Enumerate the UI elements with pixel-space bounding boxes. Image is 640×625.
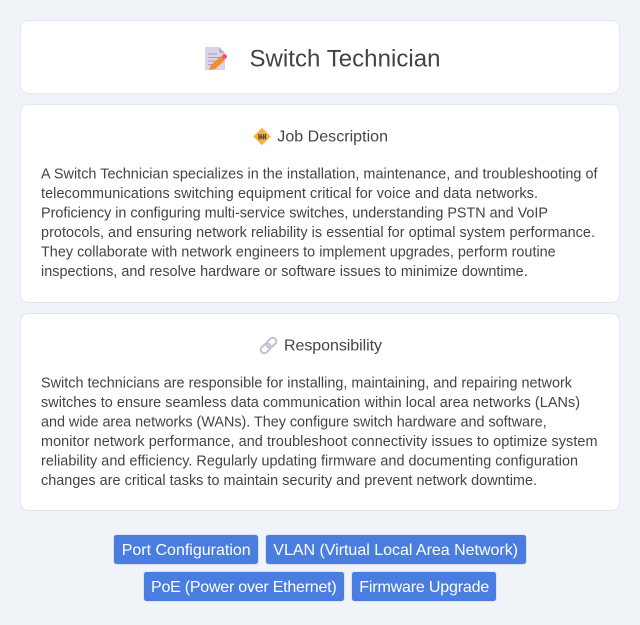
text block: responsibility: changes are critical tasks to maintain security and prevent network downtime. — [41, 473, 537, 489]
panel: responsibility — [20, 314, 620, 510]
panel: job description — [20, 104, 620, 302]
tag: port configuration — [114, 534, 258, 564]
icon: document with pencil — [205, 47, 227, 70]
text block: job description — [41, 166, 598, 280]
text block: responsibility: and wide area networks (WANs). They configure switch hardware and software, — [41, 414, 547, 430]
text block: responsibility — [41, 376, 598, 489]
tag: vlan: VLAN (Virtual Local Area Network) — [273, 542, 518, 559]
text block: job description: inspections, and resolve hardware or software issues to minimize downtime. — [41, 264, 528, 280]
icon: orange diamond sign — [254, 128, 270, 144]
text block: responsibility: reliability and efficiency. Regularly updating firmware and documenting configuration — [41, 454, 578, 470]
text block: job description: Proficiency in configuring multi-service switches, understanding PSTN and VoIP — [41, 206, 548, 222]
tag: poe — [144, 572, 344, 602]
text block: job description: A Switch Technician specializes in the installation, maintenance, and troubleshooting of — [41, 166, 598, 182]
heading: responsibility: Responsibility — [284, 338, 382, 354]
text block: responsibility: switches to ensure seamless data communication within local area networks (LANs) — [41, 395, 580, 411]
tag: port configuration: Port Configuration — [122, 542, 251, 559]
tag: firmware upgrade — [352, 572, 496, 602]
text block: job description: telecommunications switching equipment critical for voice and data networks. — [41, 186, 538, 202]
heading: job description: Job Description — [277, 128, 388, 146]
text block: responsibility: monitor network performance, and troubleshoot connectivity issues to optimize system — [41, 434, 598, 450]
text block: job description: protocols, and ensuring network reliability is essential for optimal system performance. — [41, 225, 595, 241]
title: Switch Technician — [250, 46, 440, 72]
tag: firmware upgrade: Firmware Upgrade — [359, 579, 489, 596]
text block: job description: They collaborate with network engineers to implement upgrades, perform routine — [41, 244, 556, 260]
tag: vlan — [266, 534, 526, 564]
tag: poe: PoE (Power over Ethernet) — [151, 579, 337, 596]
text block: responsibility: Switch technicians are responsible for installing, maintaining, and repairing network — [41, 376, 573, 392]
icon: chain link — [259, 336, 278, 355]
panel: title card — [20, 20, 620, 94]
